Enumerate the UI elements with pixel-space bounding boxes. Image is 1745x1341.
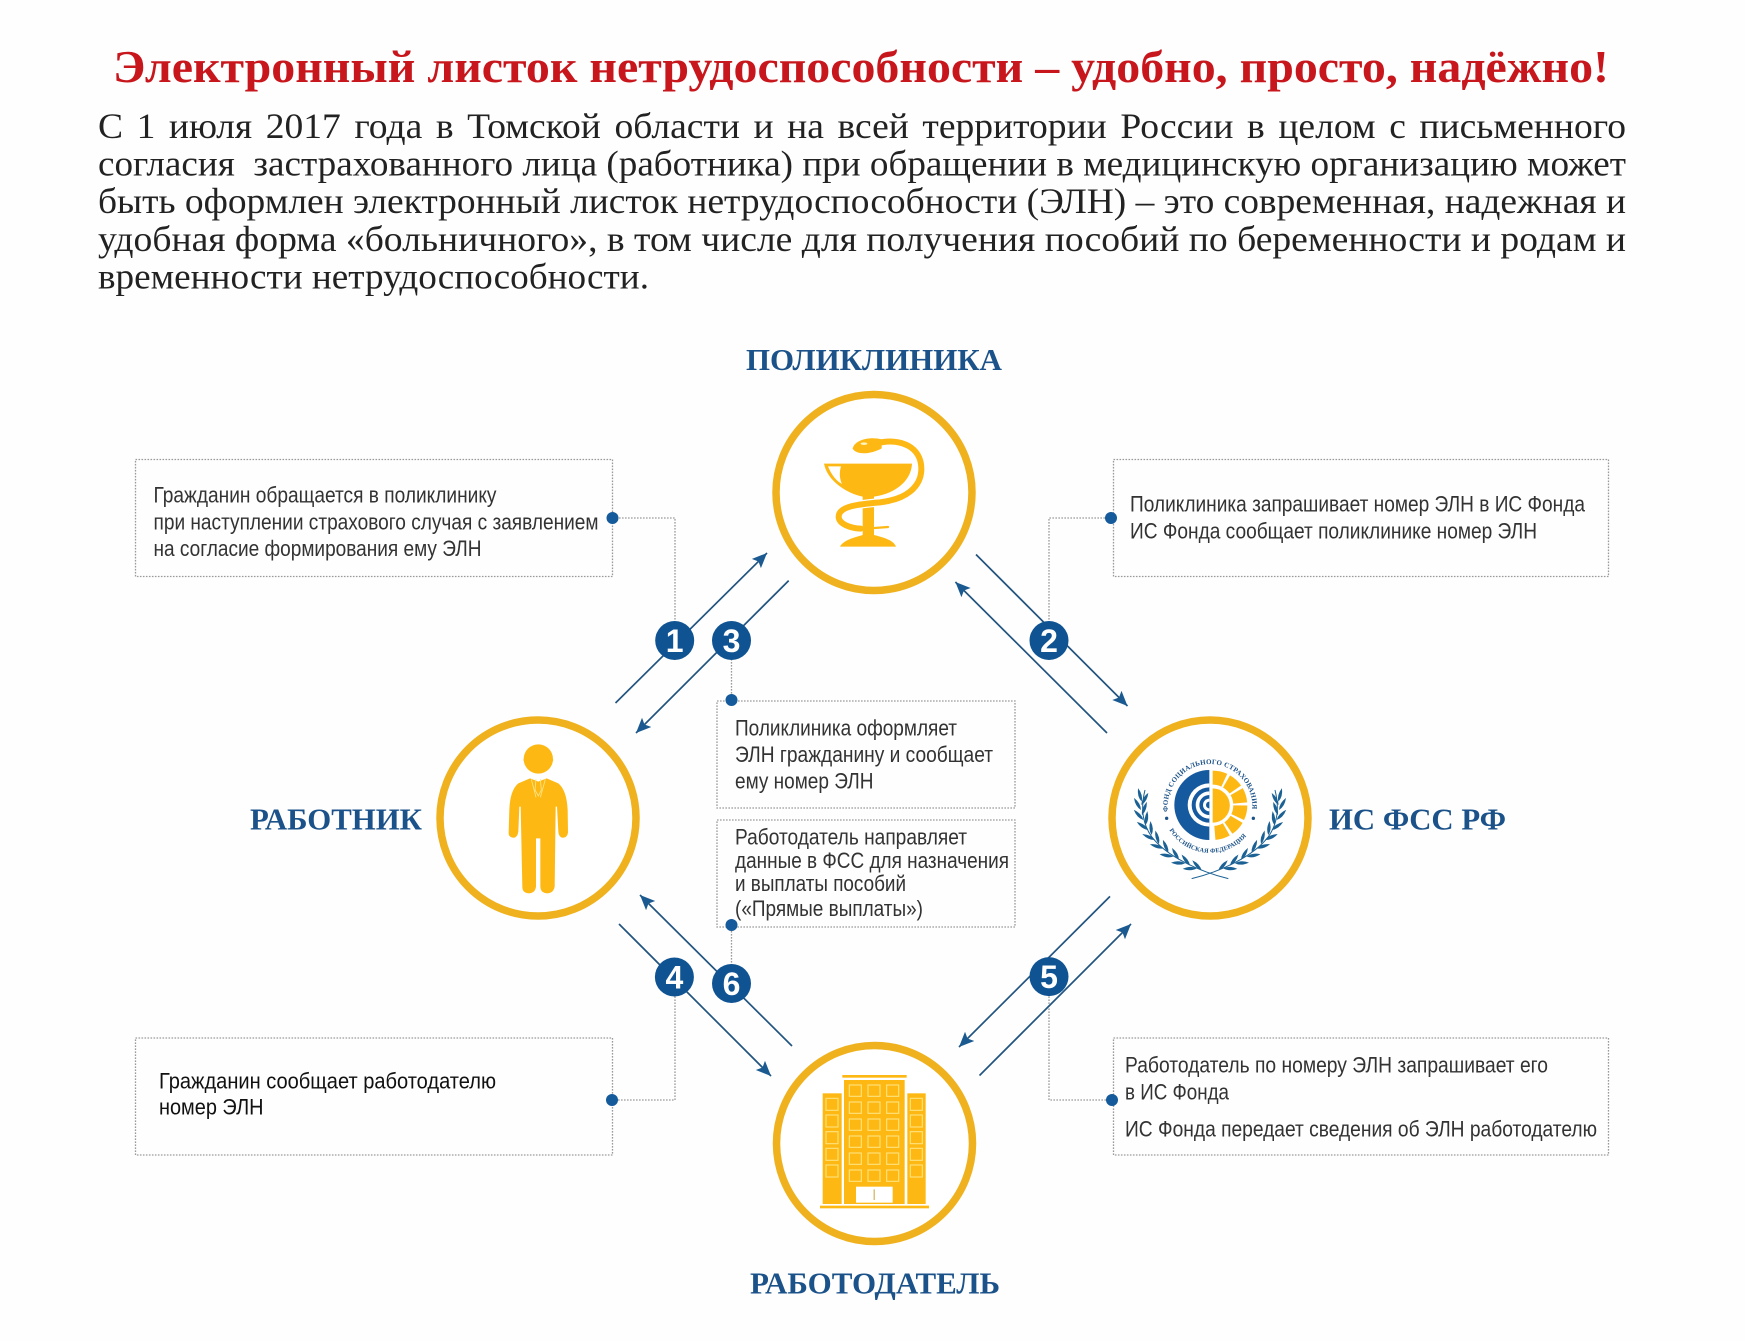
intro text block: удобная форма «больничного», в том числе для получения пособий по беременности и родам и: [98, 219, 1626, 259]
callout box 1: на согласие формирования ему ЭЛН: [154, 536, 482, 561]
badge 1: 1: [666, 623, 684, 659]
callout box 5: в ИС Фонда: [1125, 1079, 1230, 1104]
panel: FSS circle with emblem: [1108, 716, 1312, 920]
callout box 4: [136, 1038, 612, 1155]
callout box 3: ему номер ЭЛН: [735, 769, 874, 794]
label: ис фсс рф: ИС ФСС РФ: [1329, 802, 1506, 836]
icon: bowl of Hygieia: [824, 438, 921, 547]
panel: employer circle with building icon: [776, 1046, 972, 1242]
intro text block: быть оформлен электронный листок нетрудоспособности (ЭЛН) – это современная, надежная и: [98, 181, 1626, 221]
callout box 3: ЭЛН гражданину и сообщает: [735, 742, 993, 767]
callout box 6: («Прямые выплаты»): [735, 896, 923, 921]
icon: FSS emblem: [1134, 759, 1286, 880]
badge 2: [1030, 621, 1068, 660]
intro text block: [98, 106, 1626, 296]
panel: clinic circle with bowl of Hygieia icon: [776, 394, 972, 590]
badge 3: [712, 621, 751, 660]
callout box 1: [136, 460, 612, 576]
icon: FSS emblem: РОССИЙСКАЯ ФЕДЕРАЦИЯ: [1169, 828, 1246, 854]
callout box 6: Работодатель направляет: [735, 825, 967, 850]
callout box 2: ИС Фонда сообщает поликлинике номер ЭЛН: [1130, 518, 1537, 544]
callout box 3: [717, 701, 1015, 808]
callout box 1: Гражданин обращается в поликлинику: [154, 483, 496, 508]
badge 4: [655, 958, 694, 996]
callout box 4: номер ЭЛН: [159, 1094, 264, 1120]
icon: person: [509, 744, 568, 893]
icon: FSS emblem: ФОНД СОЦИАЛЬНОГО СТРАХОВАНИЯ: [1163, 759, 1257, 812]
callout box 5: ИС Фонда передает сведения об ЭЛН работодателю: [1125, 1117, 1597, 1142]
badge 6: 6: [723, 966, 740, 1002]
intro text block: временности нетрудоспособности.: [98, 256, 649, 296]
badge 4: 4: [666, 960, 684, 996]
callout box 6: и выплаты пособий: [735, 871, 906, 896]
callout box 5: Работодатель по номеру ЭЛН запрашивает его: [1125, 1053, 1548, 1078]
label: работник: РАБОТНИК: [250, 802, 423, 836]
callout box 2: [1114, 460, 1608, 576]
connector lines: [612, 518, 1112, 1100]
icon: building: [820, 1075, 929, 1208]
badge 2: 2: [1040, 623, 1058, 659]
label: работодатель: РАБОТОДАТЕЛЬ: [750, 1266, 1000, 1300]
callout box 1: при наступлении страхового случая с заявлением: [154, 509, 598, 534]
badge 5: [1030, 957, 1068, 996]
badge 1: [655, 621, 694, 660]
panel: worker circle with person icon: [440, 720, 636, 916]
label: поликлиника: ПОЛИКЛИНИКА: [746, 342, 1003, 377]
title: Электронный листок нетрудоспособности – удобно, просто, надёжно!: [113, 41, 1609, 92]
callout box 6: данные в ФСС для назначения: [735, 848, 1009, 873]
intro text block: С 1 июля 2017 года в Томской области и на всей территории России в целом с письменного: [98, 106, 1626, 146]
badge 5: 5: [1040, 959, 1058, 995]
arrows: [616, 553, 1131, 1076]
connector dots: [606, 512, 1118, 1106]
callout box 3: Поликлиника оформляет: [735, 716, 957, 741]
badge 6: [712, 964, 751, 1003]
intro text block: согласия застрахованного лица (работника) при обращении в медицинскую организацию может: [98, 144, 1626, 184]
callout box 5: [1114, 1038, 1608, 1155]
badge 3: 3: [723, 623, 740, 659]
callout box 4: Гражданин сообщает работодателю: [159, 1068, 496, 1094]
callout box 2: Поликлиника запрашивает номер ЭЛН в ИС Фонда: [1130, 492, 1586, 516]
callout box 6: [717, 820, 1015, 927]
